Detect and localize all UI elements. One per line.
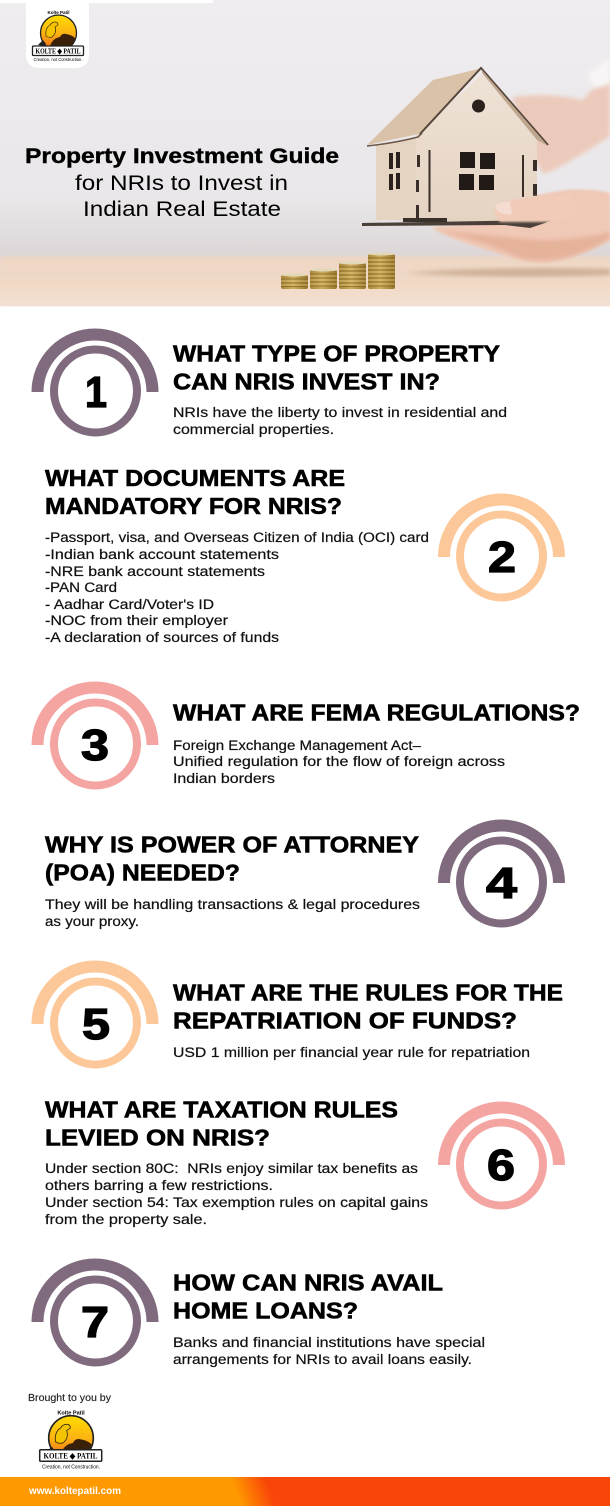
section 2 <box>45 465 559 646</box>
side windows <box>389 152 400 190</box>
body 1: commercial properties. <box>173 422 334 438</box>
badge 2 <box>444 500 559 598</box>
heading 6: LEVIED ON NRIS? <box>45 1124 270 1150</box>
front windows <box>459 152 495 190</box>
wall slots <box>416 150 537 218</box>
heading 1: CAN NRIS INVEST IN? <box>173 368 440 394</box>
document list: -Passport, visa, and Overseas Citizen of India (OCI) card <box>45 530 429 546</box>
body 7: arrangements for NRIs to avail loans easily. <box>173 1352 472 1368</box>
heading 6: WHAT ARE TAXATION RULES <box>45 1096 398 1122</box>
badge 3: 3 <box>81 721 109 770</box>
heading 2: MANDATORY FOR NRIS? <box>45 493 342 519</box>
body 3: Unified regulation for the flow of foreign across <box>173 754 505 770</box>
heading 4 <box>45 832 419 886</box>
heading 7: HOME LOANS? <box>173 1298 358 1324</box>
badge 3 <box>38 688 152 786</box>
body 6 <box>45 1161 428 1228</box>
body 3: Foreign Exchange Management Act– <box>173 738 421 754</box>
floor shadow <box>405 268 610 277</box>
heading 1: WHAT TYPE OF PROPERTY <box>173 340 500 366</box>
badge 6: 6 <box>487 1141 515 1190</box>
logo tagline: Creation, not Construction. <box>34 57 82 63</box>
footer logo: Creation, not Construction. <box>42 1464 100 1470</box>
heading 2 <box>45 465 345 519</box>
body 1: NRIs have the liberty to invest in residential and <box>173 405 507 421</box>
badge 5 <box>38 967 152 1064</box>
footer bar <box>0 1477 610 1506</box>
heading 4: (POA) NEEDED? <box>45 860 240 886</box>
website url: www.koltepatil.com <box>28 1486 121 1497</box>
document list: -NRE bank account statements <box>45 564 265 580</box>
heading 1 <box>173 340 500 394</box>
section 6 <box>45 1096 559 1228</box>
body 4: They will be handling transactions & legal procedures <box>45 897 420 913</box>
heading 2: WHAT DOCUMENTS ARE <box>45 465 345 491</box>
heading 5: REPATRIATION OF FUNDS? <box>173 1008 517 1034</box>
base plate <box>362 220 552 228</box>
body 1 <box>173 405 507 438</box>
coin stacks <box>281 252 395 289</box>
document list: -A declaration of sources of funds <box>45 630 279 646</box>
document list <box>45 530 429 646</box>
hero title <box>25 144 339 221</box>
footer logo: Kolte Patil <box>57 1410 85 1416</box>
badge 7 <box>38 1265 152 1362</box>
hero banner <box>0 0 610 306</box>
document list: -NOC from their employer <box>45 613 228 629</box>
hero title: Property Investment Guide <box>25 144 339 168</box>
badge 7: 7 <box>81 1298 109 1347</box>
heading 6 <box>45 1096 398 1150</box>
logo wordmark band: KOLTE ◆ PATIL <box>36 46 80 56</box>
section 3 <box>38 688 580 787</box>
heading 5: WHAT ARE THE RULES FOR THE <box>173 980 563 1006</box>
document list: -Indian bank account statements <box>45 547 279 563</box>
logo card <box>26 0 89 68</box>
house side wall <box>376 137 416 220</box>
round attic window <box>472 100 485 112</box>
body 7 <box>173 1335 485 1368</box>
body 3 <box>173 738 505 787</box>
section 7 <box>38 1265 485 1368</box>
badge 2: 2 <box>488 533 516 582</box>
badge 5: 5 <box>82 1000 110 1049</box>
badge 6 <box>444 1107 559 1206</box>
section 1 <box>38 335 507 438</box>
document list: -PAN Card <box>45 580 117 596</box>
section 5 <box>38 967 563 1064</box>
badge 1 <box>38 335 152 432</box>
section 4 <box>45 825 559 930</box>
heading 3: WHAT ARE FEMA REGULATIONS? <box>173 700 580 726</box>
footer logo: KOLTE ◆ PATIL <box>44 1452 98 1460</box>
badge 1: 1 <box>85 368 107 417</box>
body 7: Banks and financial institutions have special <box>173 1335 485 1351</box>
logo emblem: Kolte Patil <box>48 10 70 15</box>
body 6: others barring a few restrictions. <box>45 1178 273 1194</box>
badge 4: 4 <box>486 859 518 908</box>
thumb <box>494 194 578 222</box>
hero title: for NRIs to Invest in <box>75 171 288 195</box>
house roof <box>367 68 482 145</box>
heading 7 <box>173 1270 443 1324</box>
body 5: USD 1 million per financial year rule for repatriation <box>173 1045 530 1061</box>
heading 4: WHY IS POWER OF ATTORNEY <box>45 832 419 858</box>
document list: - Aadhar Card/Voter's ID <box>45 597 214 613</box>
body 4: as your proxy. <box>45 914 139 930</box>
badge 4 <box>444 825 559 924</box>
body 6: from the property sale. <box>45 1212 207 1228</box>
body 6: Under section 54: Tax exemption rules on capital gains <box>45 1195 428 1211</box>
body 4 <box>45 897 420 930</box>
body 3: Indian borders <box>173 771 275 787</box>
heading 7: HOW CAN NRIS AVAIL <box>173 1270 443 1296</box>
hero title: Indian Real Estate <box>83 197 281 221</box>
hands holding the house <box>432 58 610 263</box>
model house <box>362 68 552 228</box>
house front wall <box>416 74 537 222</box>
brought to you by label: Brought to you by <box>28 1392 112 1404</box>
body 6: Under section 80C: NRIs enjoy similar tax benefits as <box>45 1161 418 1177</box>
heading 5 <box>173 980 563 1034</box>
footer logo <box>40 1410 102 1470</box>
